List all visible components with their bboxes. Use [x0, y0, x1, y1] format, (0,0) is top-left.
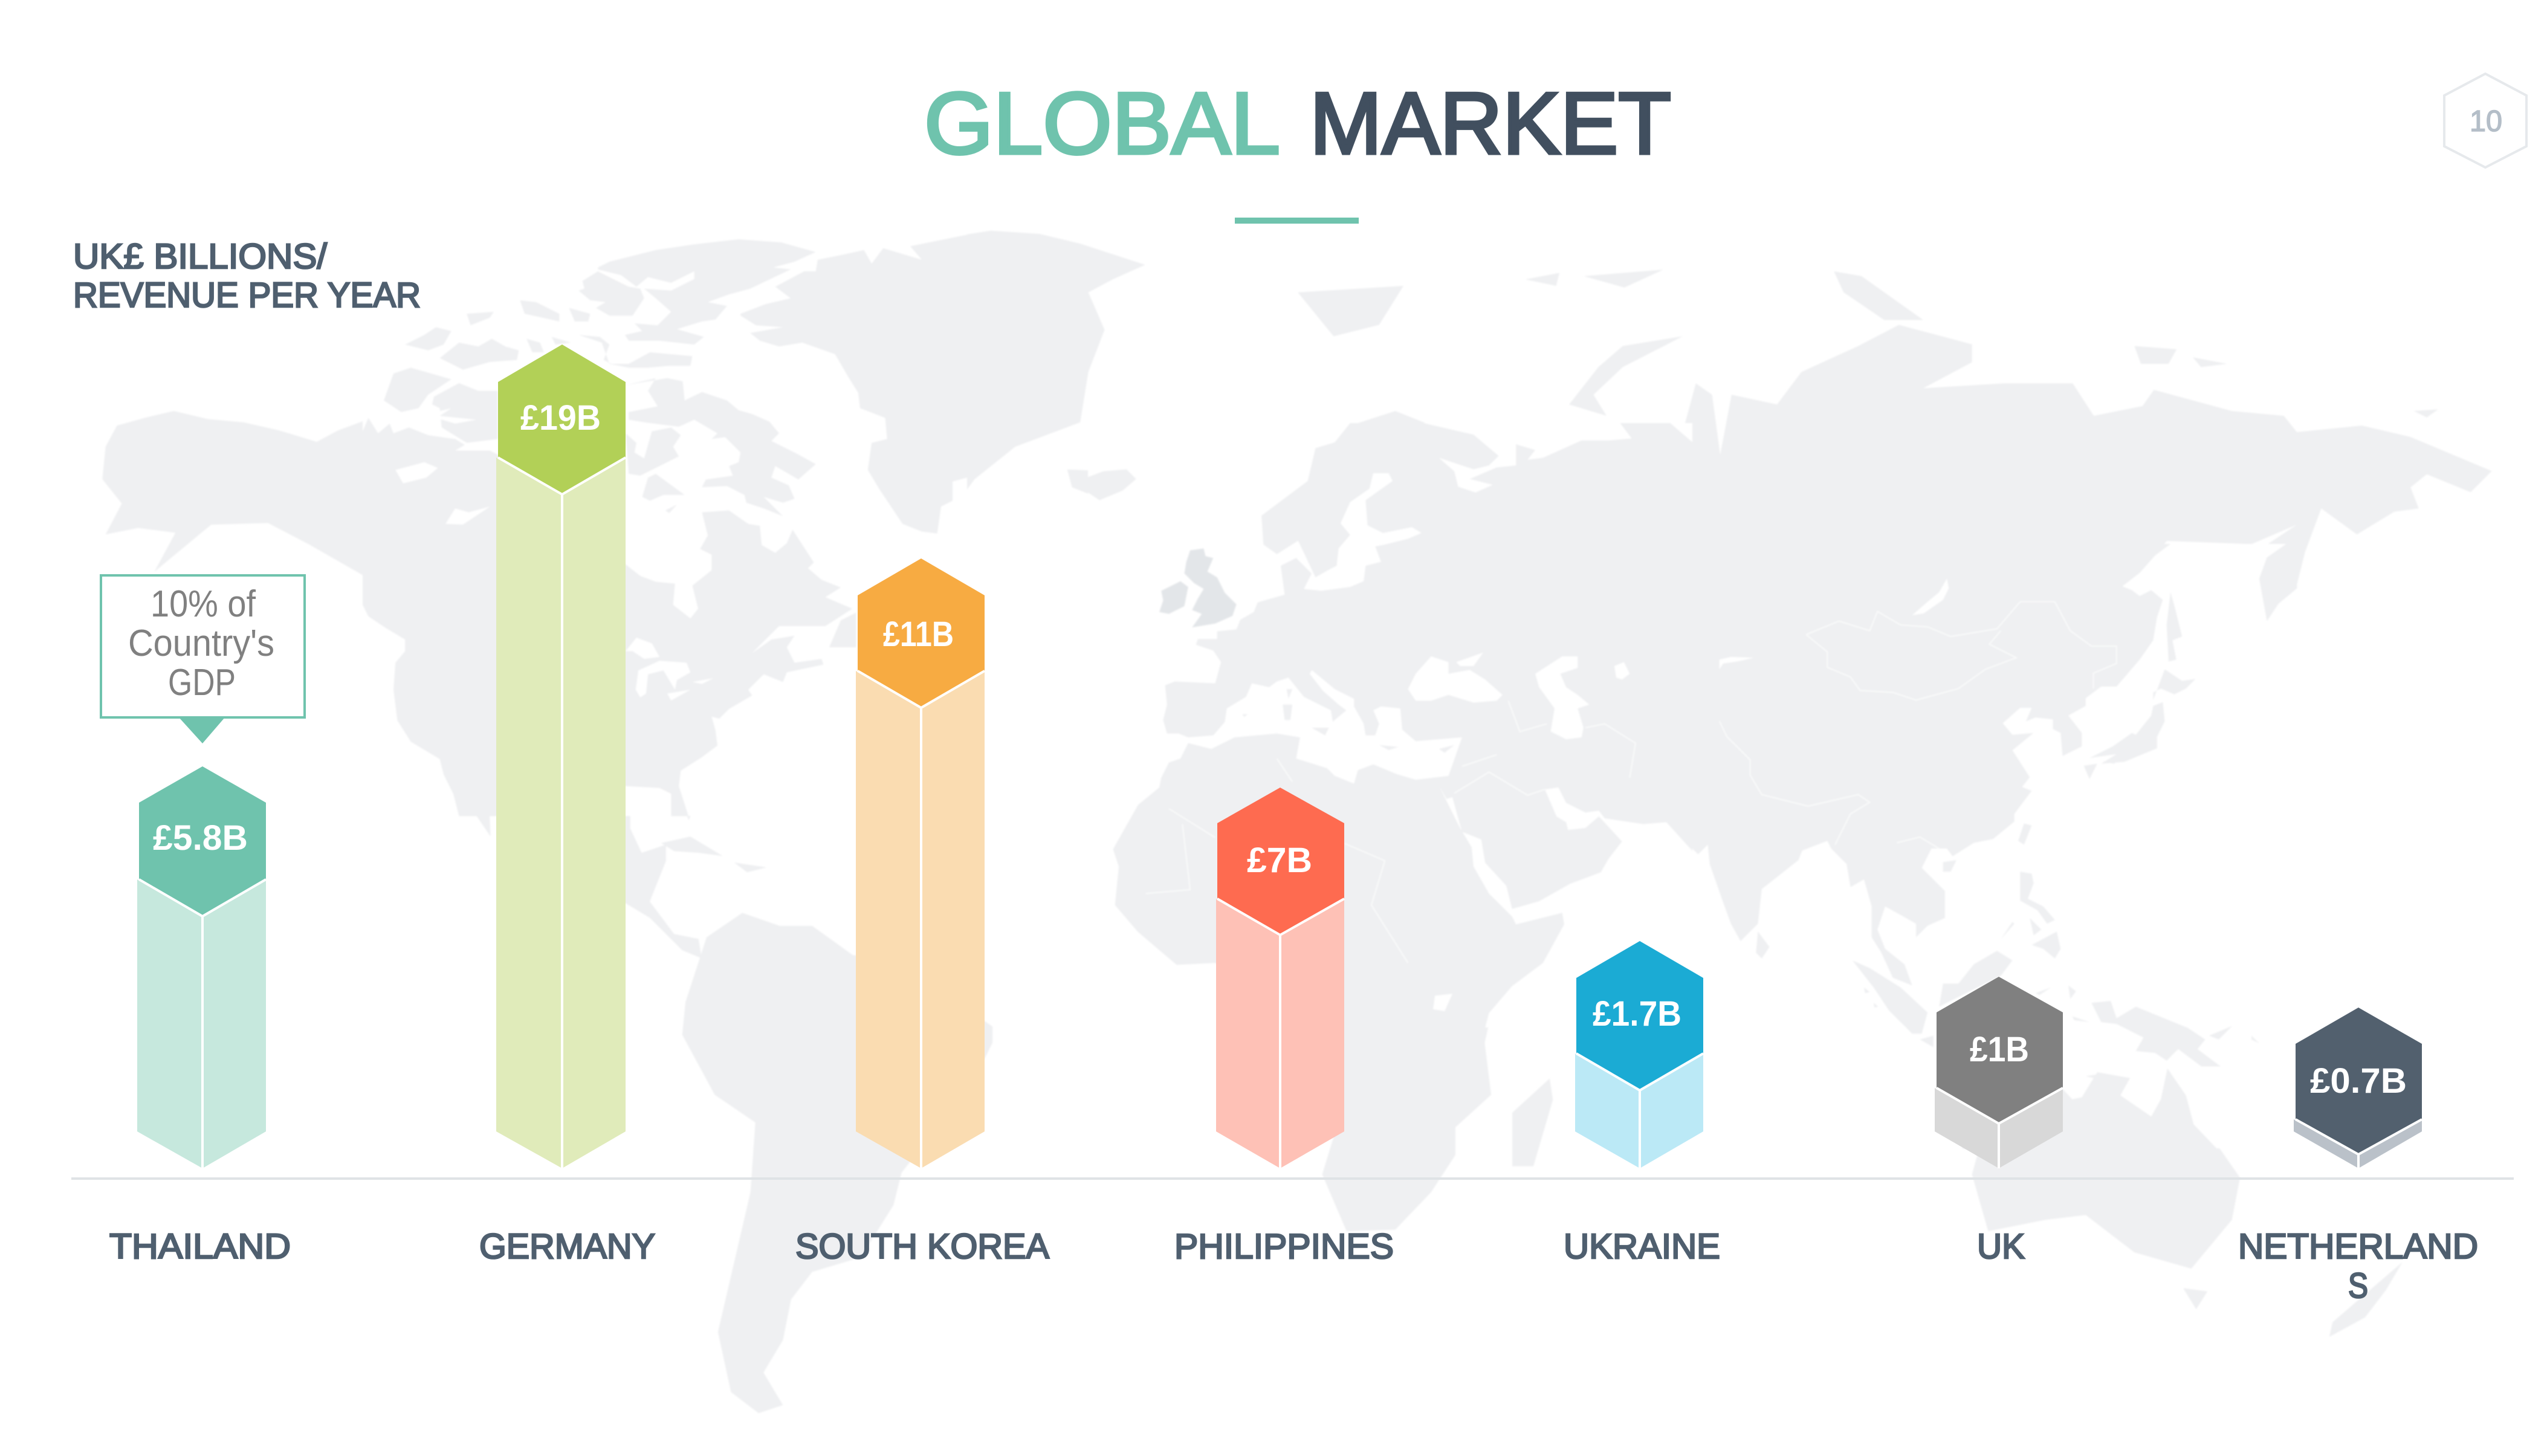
bar: UK £1B	[1935, 977, 2063, 1168]
callout: 10% of Country's GDP: GDP	[168, 662, 236, 704]
axis label: UK£ BILLIONS/	[73, 237, 328, 276]
bar: Germany £19B: £19B	[520, 398, 601, 438]
page number badge	[2444, 74, 2526, 167]
title underline	[1235, 218, 1359, 224]
map: detailed Europe, Middle East and North Africa	[1088, 423, 1692, 1027]
bar: South Korea £11B: £11B	[883, 615, 954, 654]
page number badge: 10	[2470, 105, 2502, 138]
title	[924, 74, 1671, 172]
bar: Germany £19B	[496, 345, 626, 1168]
label: Thailand: THAILAND	[109, 1227, 291, 1266]
title word: GLOBAL: GLOBAL	[924, 74, 1280, 172]
label: Germany: GERMANY	[479, 1227, 655, 1266]
bar: Thailand £5.8B: £5.8B	[153, 818, 248, 858]
bar: Netherlands £0.7B: £0.7B	[2310, 1061, 2407, 1101]
bar: Ukraine £1.7B: £1.7B	[1593, 994, 1681, 1034]
bar: UK £1B: £1B	[1970, 1030, 2029, 1069]
bar: Philippines £7B	[1216, 788, 1344, 1168]
bar: Ukraine £1.7B	[1575, 941, 1703, 1168]
axis label: REVENUE PER YEAR	[73, 276, 421, 315]
bar: Philippines £7B: £7B	[1247, 841, 1312, 880]
baseline axis	[71, 1177, 2514, 1180]
bar: Thailand £5.8B	[137, 766, 266, 1168]
label: Netherlands (wrapped): NETHERLAND	[2238, 1227, 2478, 1266]
map: detailed East and Southeast Asia	[1692, 544, 2297, 1148]
label: Philippines: PHILIPPINES	[1174, 1227, 1394, 1266]
label: South Korea: SOUTH KOREA	[795, 1227, 1049, 1266]
world map background	[102, 212, 2492, 1413]
map: detailed Canada, Greenland and northern USA	[363, 212, 967, 816]
map: base continents and outer islands	[102, 231, 2492, 1413]
label: Ukraine: UKRAINE	[1564, 1227, 1720, 1266]
label: Netherlands (wrapped): S	[2348, 1266, 2368, 1306]
callout: 10% of Country's GDP	[101, 575, 305, 743]
title word: MARKET: MARKET	[1310, 74, 1671, 172]
label: Netherlands (wrapped)	[2238, 1227, 2478, 1306]
callout: 10% of Country's GDP: Country's	[128, 623, 274, 664]
label: UK: UK	[1977, 1227, 2025, 1266]
bar: Netherlands £0.7B	[2294, 1008, 2422, 1168]
bar: South Korea £11B	[856, 558, 985, 1168]
country labels	[109, 1227, 2478, 1306]
axis label	[73, 237, 421, 315]
callout: 10% of Country's GDP: 10% of	[150, 583, 256, 625]
